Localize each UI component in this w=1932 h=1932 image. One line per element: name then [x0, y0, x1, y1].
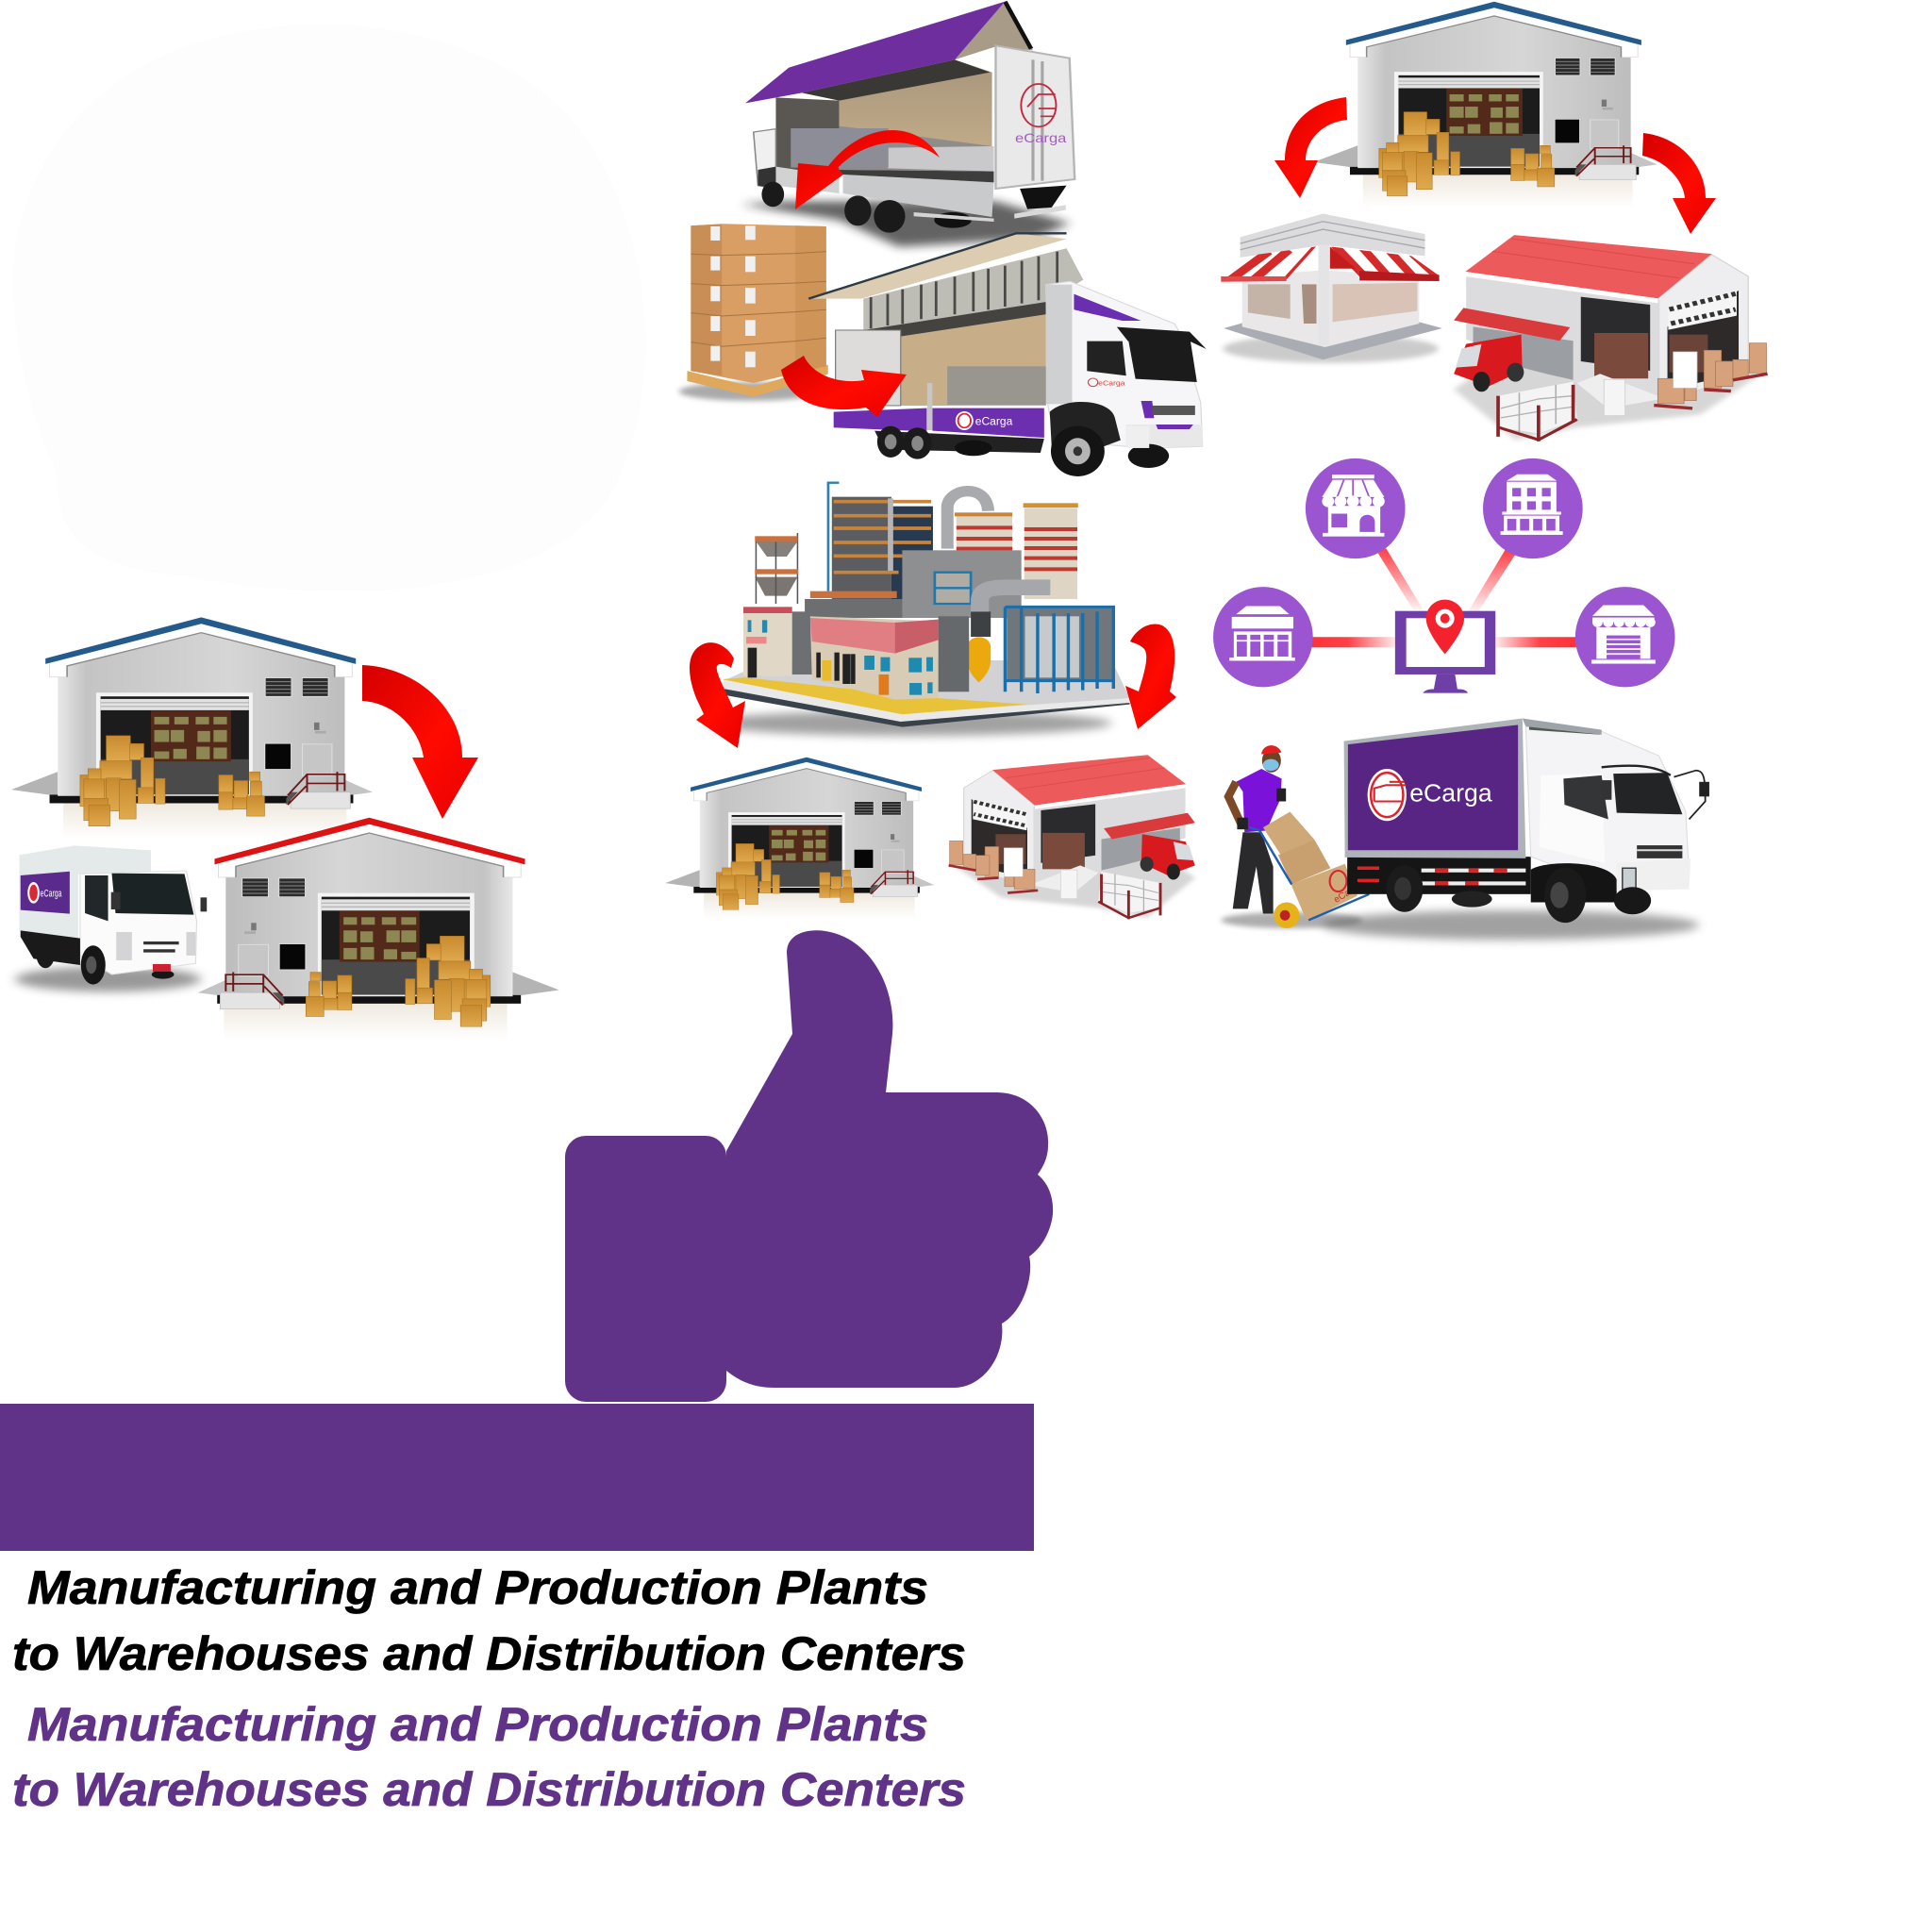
hand: [726, 930, 1053, 1388]
warehouse: top right: [1313, 2, 1657, 208]
arrow: factory to warehouse: [690, 642, 745, 748]
faint background watermark: [13, 25, 645, 591]
ecarga logo on small truck: eCarga: [41, 887, 62, 899]
truck: rear view wing van with purple wing: [741, 2, 1074, 247]
icon: garage shop right: [1575, 587, 1675, 687]
heading: purple: [12, 1698, 966, 1816]
arrow: warehouse to distribution center: [1642, 133, 1716, 234]
location network diagram: [1213, 458, 1675, 693]
silos: [947, 491, 1078, 599]
arrow: from truck to pallet: [795, 130, 940, 209]
water tower: [755, 533, 798, 604]
heading: purple: to Warehouses and Distribution Centers: [12, 1763, 966, 1816]
arrow: from pallet to truck: [781, 356, 907, 417]
delivery worker with hand truck: [1221, 745, 1369, 928]
arrow: factory to distribution center: [1125, 625, 1176, 729]
box logo: [1330, 871, 1364, 906]
ecarga logo on panel: eCarga: [975, 415, 1013, 427]
warehouse: lower left red roof: [198, 818, 559, 1040]
purple banner bar: [0, 1404, 1034, 1551]
heading: purple: Manufacturing and Production Plants: [27, 1698, 928, 1751]
distribution center: top right: [1454, 235, 1768, 441]
small delivery truck: [15, 845, 207, 991]
distribution center: middle: [949, 755, 1195, 919]
warehouse: lower left blue roof: [11, 617, 373, 840]
monitor with map pin: [1395, 600, 1495, 693]
factory: [708, 483, 1130, 736]
ecarga logo on small truck: [27, 882, 62, 904]
ecarga logo on cab: eCarga: [1098, 379, 1125, 387]
connector lines: [1310, 548, 1576, 647]
truck: side view wing van with purple panel: [808, 233, 1207, 476]
ecarga logo on panel: [956, 411, 1013, 430]
ecarga logo on truck: eCarga: [1409, 779, 1492, 807]
tall structure: [805, 483, 967, 618]
retail store: [1221, 213, 1442, 363]
box logo: eCarga: [1332, 880, 1364, 906]
cuff: [565, 1136, 726, 1402]
low pink office building: [743, 607, 969, 700]
arrow: warehouse to warehouse: [362, 665, 478, 819]
ecarga logo on cab: [1088, 378, 1125, 387]
heading: black: Manufacturing and Production Plants: [27, 1561, 928, 1614]
icon: office building: [1483, 458, 1583, 558]
ecarga logo on door: eCarga: [1015, 131, 1067, 146]
warehouse: middle: [665, 758, 934, 920]
ecarga delivery truck: [1322, 719, 1709, 940]
arrow: warehouse to store: [1274, 97, 1347, 198]
icon: shop: [1306, 458, 1406, 558]
icon: storefront left: [1213, 587, 1313, 687]
central plant and ducts: [902, 550, 1113, 693]
thumbs up icon: [565, 930, 1053, 1402]
heading: black: [12, 1561, 966, 1680]
pallet of cartons: [679, 224, 828, 401]
ecarga logo on door: [1015, 84, 1067, 146]
heading: black: to Warehouses and Distribution Centers: [12, 1627, 966, 1680]
ecarga logo on truck: [1368, 769, 1492, 821]
